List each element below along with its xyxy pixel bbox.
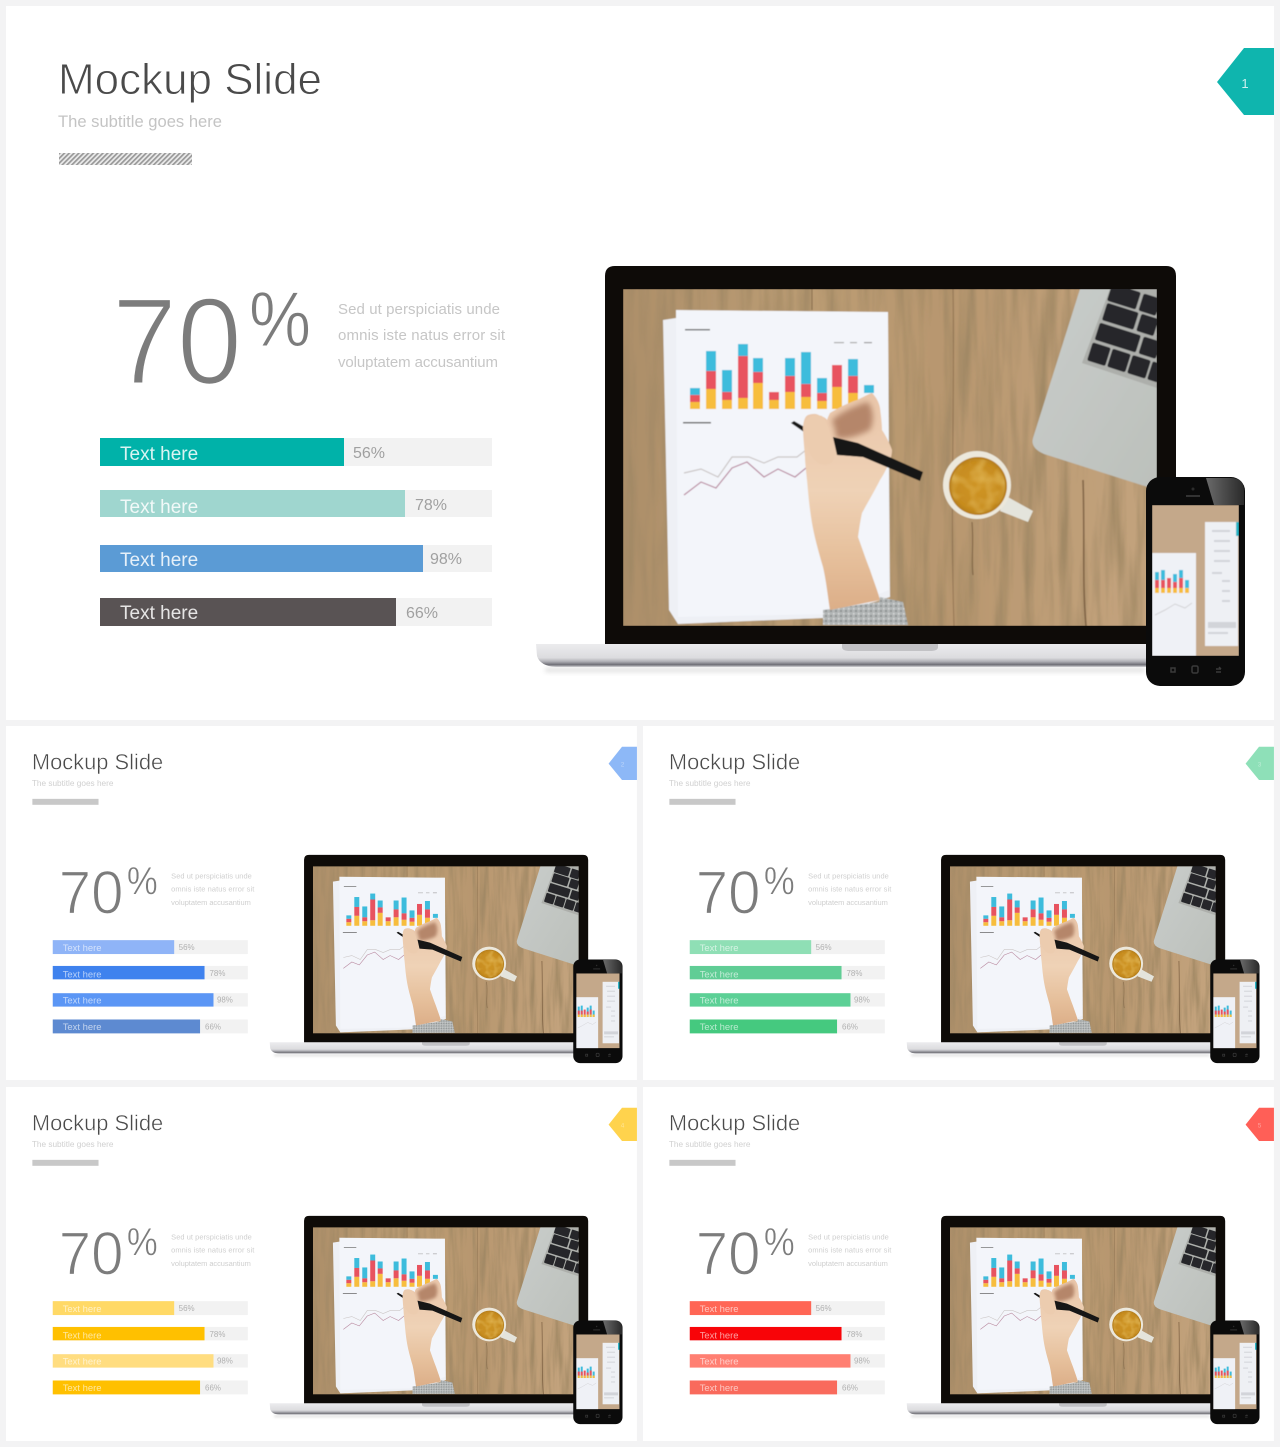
photo line chart	[684, 450, 806, 495]
sleeve	[823, 597, 908, 625]
page tag	[609, 747, 637, 780]
panel: green slide	[643, 726, 1274, 1080]
description text: omnis iste natus error sit	[338, 327, 506, 344]
bar chart: Text here	[700, 942, 739, 953]
index finger	[804, 415, 834, 465]
phone screen	[1152, 505, 1239, 656]
phone	[1146, 477, 1245, 686]
bar chart: 56%	[179, 1304, 195, 1313]
description text: omnis iste natus error sit	[808, 1246, 892, 1255]
panel: yellow slide	[6, 1087, 637, 1441]
bar 78%: Text here	[120, 497, 198, 518]
bar 56%	[100, 438, 492, 466]
subtitle: The subtitle goes here	[669, 1139, 751, 1149]
bar chart: Text here	[700, 1021, 739, 1032]
photo background laptop	[1032, 283, 1193, 490]
divider	[32, 799, 99, 805]
page tag: 4	[621, 1123, 625, 1130]
bar 66%: Text here	[120, 603, 198, 624]
pen	[833, 437, 923, 481]
bar chart: Text here	[63, 1329, 102, 1340]
big stat: 70%: 70	[59, 858, 123, 926]
hatched divider	[59, 153, 192, 165]
big stat: 70%	[112, 274, 311, 411]
subtitle: The subtitle goes here	[32, 1139, 114, 1149]
bar 98%	[100, 545, 492, 572]
big stat: 70%	[696, 1219, 795, 1287]
description text: Sed ut perspiciatis unde	[808, 1233, 889, 1242]
bar chart: 66%	[842, 1022, 858, 1031]
bar chart: 56%	[816, 943, 832, 952]
title: Mockup Slide	[32, 750, 163, 775]
panel: main slide	[6, 6, 1274, 720]
big stat: 70%: %	[764, 861, 795, 904]
bar chart: 78%	[210, 969, 225, 978]
big stat: 70%: %	[127, 1222, 158, 1265]
bar 56%: 56%	[353, 445, 385, 462]
big stat: 70%: 70	[112, 274, 242, 411]
hand and arm	[803, 393, 892, 610]
bar chart: 66%	[205, 1022, 221, 1031]
description text: voluptatem accusantium	[171, 1259, 251, 1268]
page tag: 1	[1241, 76, 1249, 91]
title: Mockup Slide	[669, 750, 800, 775]
bar chart: Text here	[63, 995, 102, 1006]
page tag: 2	[621, 762, 625, 769]
panel: blue slide	[6, 726, 637, 1080]
bar chart: Text here	[700, 1356, 739, 1367]
coffee mug	[943, 451, 1033, 522]
laptop bezel	[605, 266, 1176, 644]
page tag	[1246, 1108, 1274, 1141]
bar 56%: Text here	[120, 444, 198, 465]
big stat: 70%: %	[764, 1222, 795, 1265]
bar chart: 78%	[210, 1330, 225, 1339]
description text: omnis iste natus error sit	[171, 1246, 255, 1255]
page tag: 3	[1258, 762, 1262, 769]
bar chart: 98%	[217, 996, 233, 1005]
panel: red slide	[643, 1087, 1274, 1441]
divider	[669, 799, 736, 805]
laptop screen photo	[623, 283, 1193, 626]
bar chart: Text here	[700, 1382, 739, 1393]
description text	[338, 301, 506, 371]
bar chart	[690, 1301, 885, 1394]
bar chart	[690, 940, 885, 1033]
bar chart: 56%	[816, 1304, 832, 1313]
title: Mockup Slide	[58, 55, 322, 104]
bar chart: Text here	[63, 1021, 102, 1032]
phone buttons	[1171, 666, 1221, 673]
bar chart: Text here	[700, 995, 739, 1006]
description text: Sed ut perspiciatis unde	[338, 301, 500, 318]
device mockup: laptop and phone	[536, 266, 1245, 686]
subtitle: The subtitle goes here	[32, 778, 114, 788]
description text: Sed ut perspiciatis unde	[808, 872, 889, 881]
bar chart: Text here	[700, 1303, 739, 1314]
bar chart: Text here	[700, 968, 739, 979]
bar chart: 98%	[854, 996, 870, 1005]
description text: voluptatem accusantium	[171, 898, 251, 907]
device mockup	[270, 1216, 623, 1424]
device mockup	[907, 1216, 1260, 1424]
big stat: 70%: 70	[696, 858, 760, 926]
bar 78%	[100, 490, 492, 518]
description text: Sed ut perspiciatis unde	[171, 1233, 252, 1242]
bar chart: 78%	[847, 969, 862, 978]
description text: voluptatem accusantium	[338, 354, 498, 371]
bar chart: Text here	[63, 1382, 102, 1393]
device mockup	[907, 855, 1260, 1063]
bar chart: Text here	[63, 968, 102, 979]
photo bar chart	[683, 329, 874, 424]
subtitle: The subtitle goes here	[669, 778, 751, 788]
bar 66%: 66%	[406, 605, 438, 622]
bar chart: Text here	[63, 942, 102, 953]
bar chart: 98%	[854, 1357, 870, 1366]
description text	[171, 1233, 255, 1268]
page tag: 5	[1258, 1123, 1262, 1130]
device mockup	[270, 855, 623, 1063]
big stat: 70%	[59, 858, 158, 926]
description text: voluptatem accusantium	[808, 898, 888, 907]
big stat: 70%	[59, 1219, 158, 1287]
description text	[808, 872, 892, 907]
subtitle: The subtitle goes here	[58, 112, 222, 131]
big stat: 70%: %	[127, 861, 158, 904]
bar 78%: 78%	[415, 497, 447, 514]
big stat: 70%: %	[249, 275, 311, 363]
bar 66%	[100, 598, 492, 626]
bar chart	[53, 1301, 248, 1394]
big stat: 70%: 70	[59, 1219, 123, 1287]
bar chart: 98%	[217, 1357, 233, 1366]
big stat: 70%: 70	[696, 1219, 760, 1287]
title: Mockup Slide	[32, 1111, 163, 1136]
bar chart: 66%	[842, 1383, 858, 1392]
pen tip	[791, 421, 806, 432]
bar chart: 78%	[847, 1330, 862, 1339]
bar 98%: 98%	[430, 551, 462, 568]
description text: voluptatem accusantium	[808, 1259, 888, 1268]
bar chart: 56%	[179, 943, 195, 952]
page tag	[1217, 48, 1274, 115]
bar chart: Text here	[700, 1329, 739, 1340]
description text: omnis iste natus error sit	[171, 885, 255, 894]
wood grain	[623, 289, 1157, 626]
description text	[171, 872, 255, 907]
laptop base	[536, 644, 1160, 672]
paper sheets	[663, 310, 890, 624]
bar chart: Text here	[63, 1303, 102, 1314]
bar chart	[53, 940, 248, 1033]
divider	[669, 1160, 736, 1166]
bar chart	[100, 438, 492, 626]
palm shadow	[832, 402, 873, 439]
divider	[32, 1160, 99, 1166]
page tag	[609, 1108, 637, 1141]
bar 98%: Text here	[120, 550, 198, 571]
big stat: 70%	[696, 858, 795, 926]
description text: omnis iste natus error sit	[808, 885, 892, 894]
description text	[808, 1233, 892, 1268]
bar chart: 66%	[205, 1383, 221, 1392]
wood cracks	[812, 289, 1086, 626]
bar chart: Text here	[63, 1356, 102, 1367]
page tag	[1246, 747, 1274, 780]
description text: Sed ut perspiciatis unde	[171, 872, 252, 881]
title: Mockup Slide	[669, 1111, 800, 1136]
